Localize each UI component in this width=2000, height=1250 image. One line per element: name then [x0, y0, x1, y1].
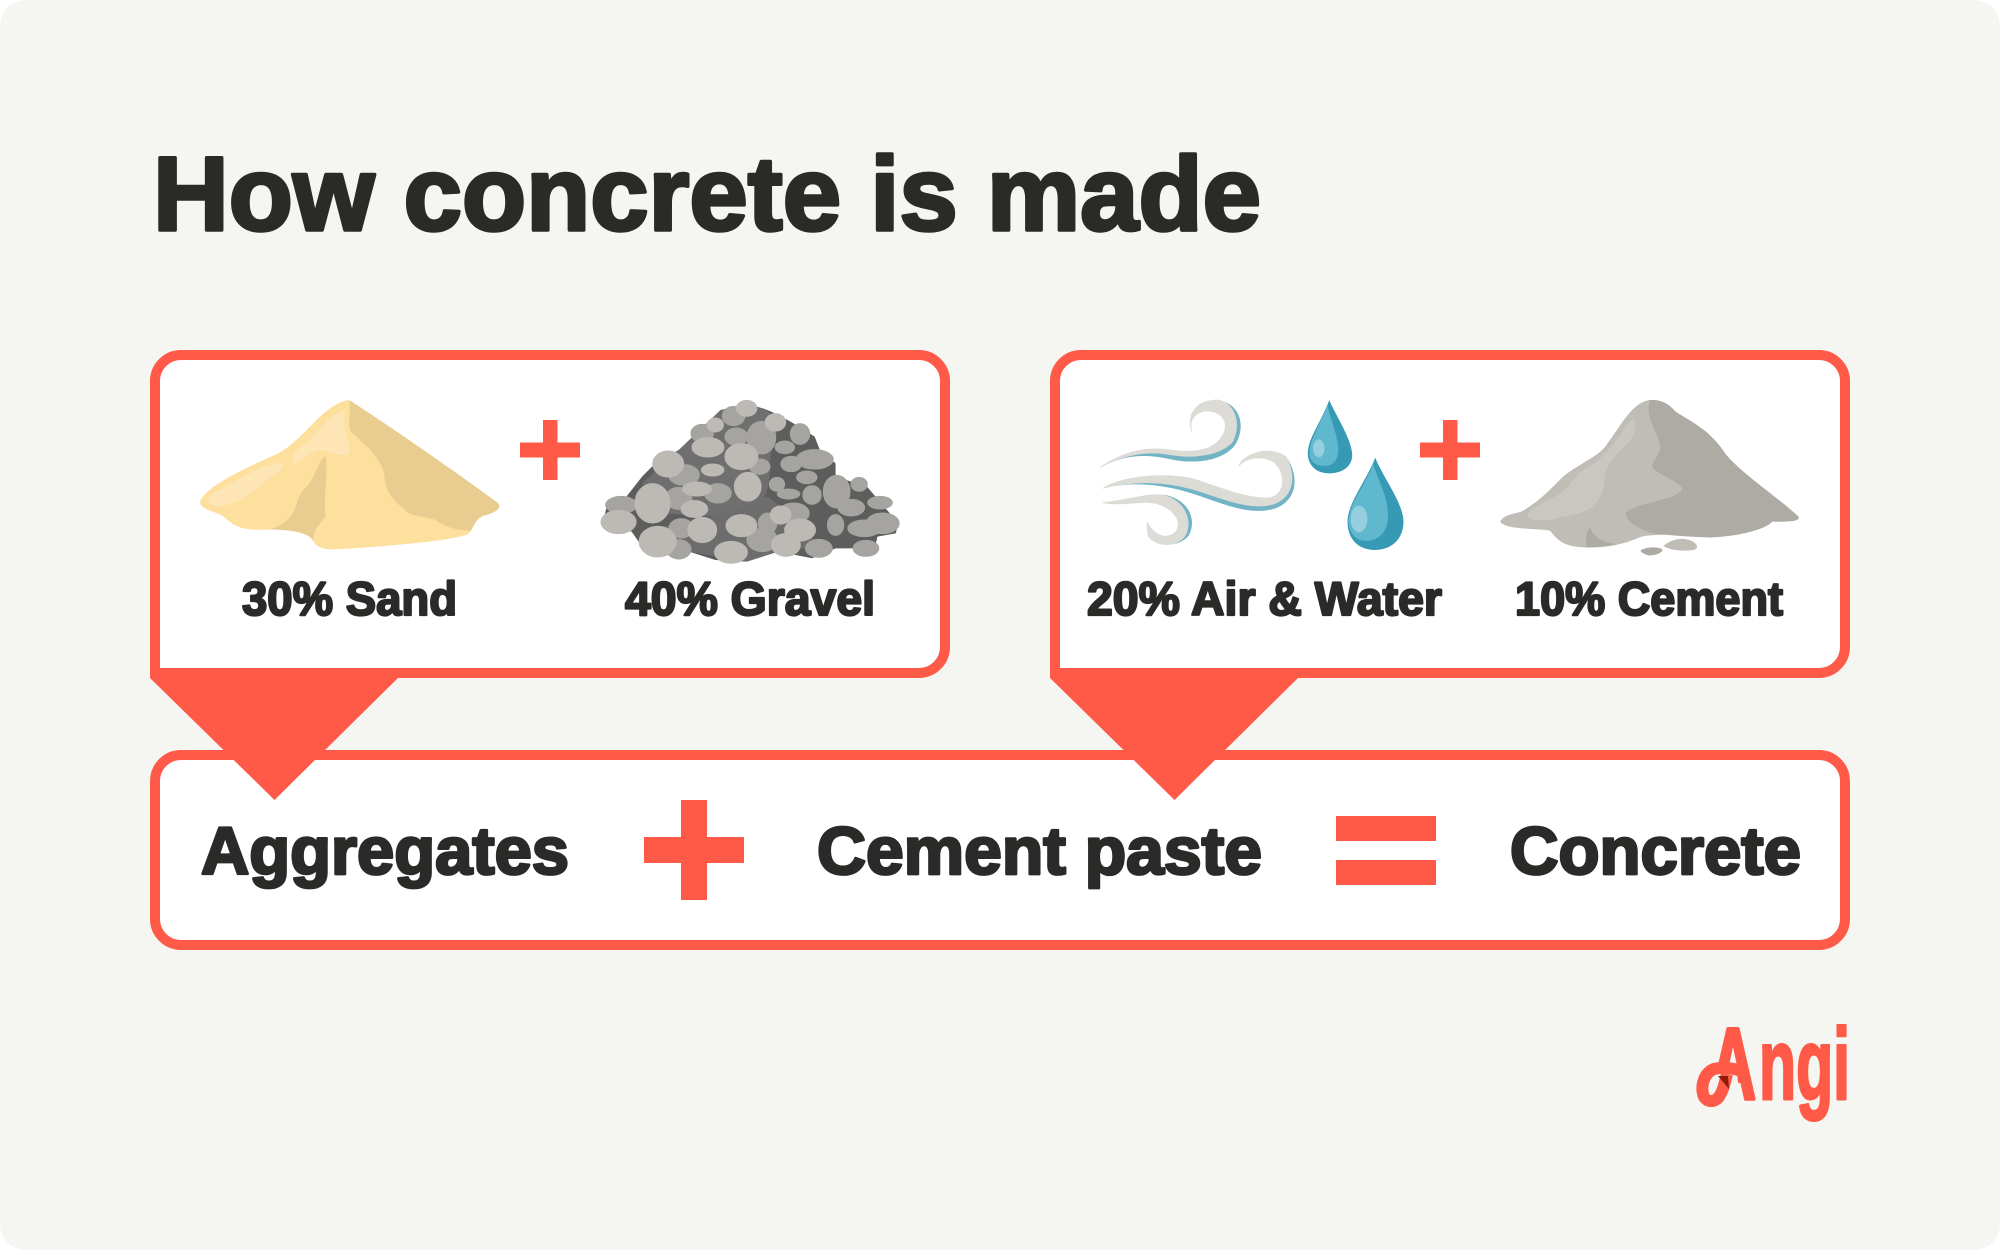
- icon: sand pile: [200, 400, 499, 549]
- panel: aggregates: [150, 355, 945, 800]
- icon: plus: [1420, 420, 1480, 480]
- title: How concrete is made: [153, 136, 1261, 253]
- icon: equals sign: [1336, 816, 1436, 885]
- icon: gravel pile: [602, 401, 898, 563]
- arrow: cement paste pointer: [1050, 668, 1298, 800]
- icon: cement pile: [1500, 400, 1799, 555]
- icon: plus: [520, 420, 580, 480]
- arrow: aggregates pointer: [150, 668, 398, 800]
- panel: result equation: [155, 755, 1845, 945]
- logo: Angi: [1696, 1024, 1847, 1122]
- label: 20% Air & Water: 20% Air & Water: [1087, 572, 1442, 625]
- logo: Angi: ngi: [1759, 1009, 1850, 1121]
- label: 10% Cement: 10% Cement: [1515, 572, 1783, 625]
- label: 30% Sand: 30% Sand: [242, 572, 457, 625]
- icon: air swirls: [1100, 400, 1295, 545]
- label: Aggregates: Aggregates: [201, 814, 569, 889]
- panel: cement paste: [1050, 355, 1845, 800]
- label: 40% Gravel: 40% Gravel: [625, 572, 875, 625]
- icon: large plus: [644, 800, 744, 900]
- logo: Angi: A: [1710, 1009, 1756, 1121]
- icon: water drops: [1308, 400, 1403, 550]
- label: Cement paste: Cement paste: [817, 814, 1262, 889]
- label: Concrete: Concrete: [1510, 814, 1801, 889]
